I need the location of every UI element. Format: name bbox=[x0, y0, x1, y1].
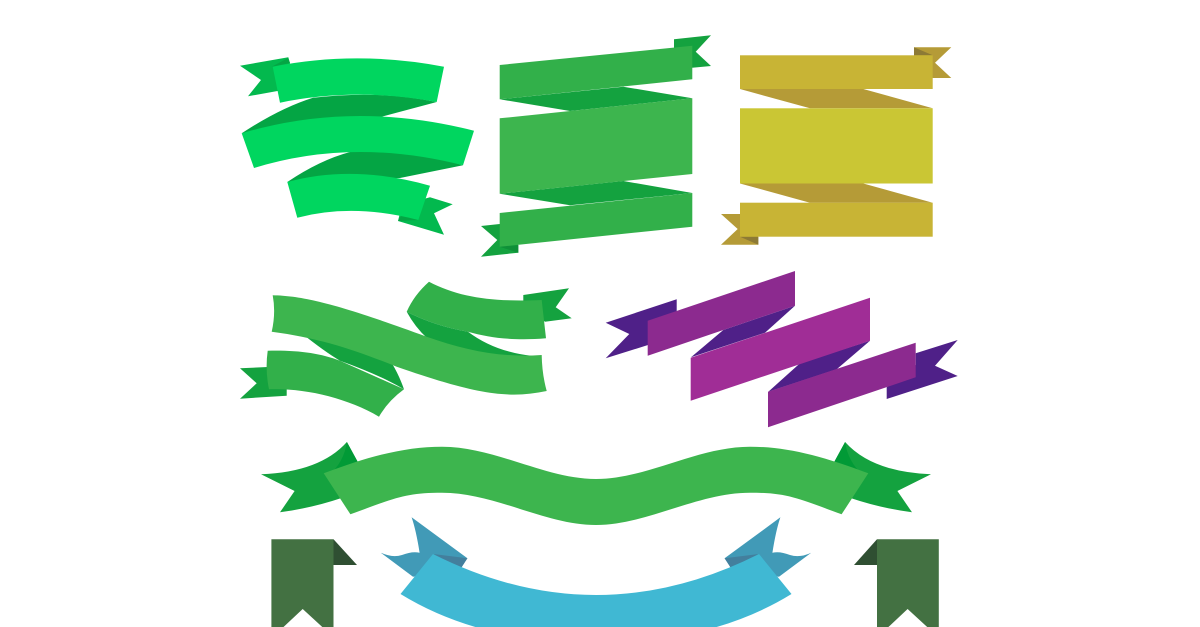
ribbon: purple diagonal bbox=[606, 271, 958, 427]
middle band bbox=[691, 298, 870, 401]
bottom band bbox=[500, 193, 692, 247]
folds bbox=[500, 87, 692, 205]
lower band bbox=[768, 343, 916, 427]
top band bbox=[740, 55, 933, 89]
ribbon: blue arc bbox=[381, 517, 811, 627]
top band bbox=[500, 46, 692, 99]
left tail bbox=[606, 299, 677, 358]
bottom band bbox=[740, 203, 933, 237]
right tail bbox=[725, 517, 811, 577]
body bbox=[271, 539, 334, 627]
folds bbox=[691, 306, 870, 392]
middle band bbox=[242, 116, 474, 168]
wave band bbox=[324, 447, 868, 525]
upper band bbox=[648, 271, 795, 356]
arc band bbox=[400, 554, 792, 627]
top tail bbox=[674, 35, 711, 68]
right tail bbox=[834, 442, 931, 512]
left tail bbox=[240, 367, 287, 399]
folds bbox=[740, 89, 933, 203]
bottom band bbox=[287, 174, 430, 220]
bookmark: left dark green bbox=[271, 539, 357, 627]
left tail bbox=[240, 57, 290, 96]
folds bbox=[242, 95, 463, 182]
fold bbox=[854, 539, 877, 565]
ribbon: bright green curved bbox=[240, 57, 474, 235]
body bbox=[877, 539, 939, 627]
tail folds bbox=[329, 442, 863, 475]
top band bbox=[273, 58, 444, 103]
middle panel bbox=[500, 98, 692, 194]
tail folds bbox=[433, 554, 759, 570]
right tail bbox=[398, 197, 453, 235]
fold bbox=[334, 539, 357, 565]
ribbon: green s-curve bbox=[240, 282, 572, 417]
lower band bbox=[267, 351, 404, 417]
ribbon: green wave bbox=[261, 442, 931, 525]
folds bbox=[300, 312, 533, 389]
bookmark: right dark green bbox=[854, 539, 939, 627]
bottom tail bbox=[481, 224, 518, 257]
ribbon: green zigzag banner bbox=[481, 35, 711, 257]
ribbon: yellow zigzag banner bbox=[721, 47, 951, 245]
top tail bbox=[914, 47, 951, 78]
right tail bbox=[887, 340, 958, 399]
main band bbox=[272, 295, 547, 395]
upper band bbox=[407, 282, 546, 339]
left tail bbox=[261, 442, 358, 512]
left tail bbox=[381, 517, 467, 577]
bottom tail bbox=[721, 214, 758, 245]
right tail bbox=[523, 288, 572, 322]
middle panel bbox=[740, 108, 933, 184]
